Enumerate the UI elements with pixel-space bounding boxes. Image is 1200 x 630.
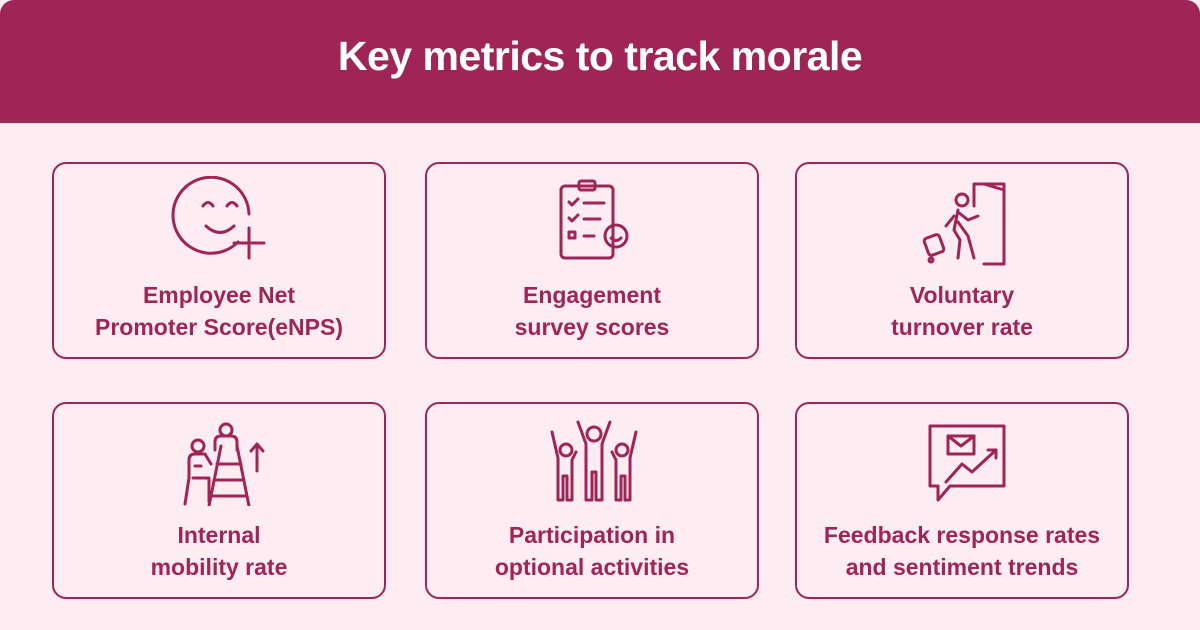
header band [0, 0, 1200, 123]
label: Employee Net [143, 282, 295, 308]
icon: person leaving through door [922, 182, 1006, 266]
card: eNPS [52, 162, 386, 359]
label [891, 282, 1033, 340]
label [515, 282, 669, 340]
label: Voluntary [910, 282, 1014, 308]
label [495, 522, 689, 580]
label: Participation in [509, 522, 675, 548]
label [824, 522, 1100, 580]
card: engagement [425, 162, 759, 359]
icon: celebrating group [550, 420, 638, 502]
label: optional activities [495, 554, 689, 580]
label: Promoter Score(eNPS) [95, 314, 343, 340]
icon: smiley plus [172, 176, 266, 260]
label: survey scores [515, 314, 669, 340]
title: Key metrics to track morale [338, 33, 862, 79]
label: Feedback response rates [824, 522, 1100, 548]
icon: people on ladder [184, 422, 265, 506]
card: mobility [52, 402, 386, 599]
icon: clipboard smiley [560, 180, 628, 260]
icon: speech bubble with envelope and trend [928, 424, 1006, 502]
label: and sentiment trends [846, 554, 1078, 580]
card: participation [425, 402, 759, 599]
label [151, 522, 287, 580]
label: turnover rate [891, 314, 1033, 340]
label [95, 282, 343, 340]
label: Engagement [523, 282, 661, 308]
label: Internal [177, 522, 261, 548]
card: turnover [795, 162, 1129, 359]
card: feedback [795, 402, 1129, 599]
label: mobility rate [151, 554, 287, 580]
